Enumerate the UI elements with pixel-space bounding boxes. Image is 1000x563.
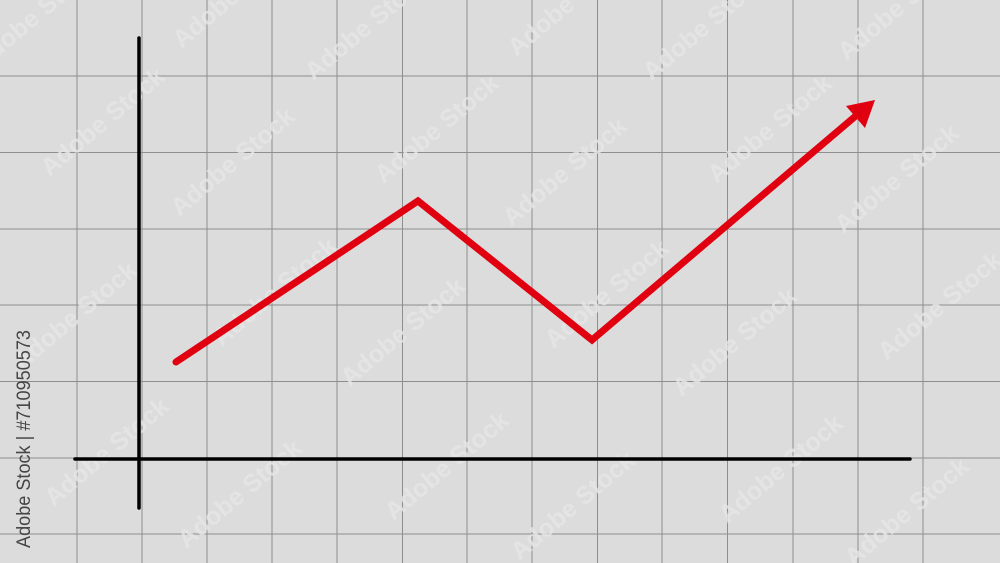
y axis bbox=[137, 38, 141, 508]
red trend line with arrow bbox=[176, 100, 875, 362]
watermarks: Adobe Stock bbox=[505, 446, 640, 563]
watermarks: Adobe Stock bbox=[369, 69, 504, 189]
watermarks: Adobe Stock bbox=[172, 434, 307, 554]
watermarks: Adobe Stock bbox=[667, 282, 802, 402]
watermarks: Adobe Stock bbox=[713, 409, 848, 529]
watermarks: Adobe Stock bbox=[207, 232, 342, 352]
watermarks: Adobe Stock bbox=[702, 69, 837, 189]
watermarks: Adobe Stock bbox=[539, 234, 674, 354]
watermarks: Adobe Stock bbox=[35, 62, 170, 182]
watermarks: Adobe Stock bbox=[165, 102, 300, 222]
stock id caption: Adobe Stock | #710950573 bbox=[14, 330, 35, 548]
watermarks: Adobe Stock bbox=[335, 272, 470, 392]
watermarks: Adobe Stock bbox=[497, 112, 632, 232]
watermarks: Adobe Stock bbox=[829, 119, 964, 239]
arrow head bbox=[846, 100, 875, 128]
watermarks: Adobe Stock bbox=[7, 256, 142, 376]
watermarks: Adobe Stock bbox=[379, 406, 514, 526]
watermarks: Adobe Stock bbox=[39, 392, 174, 512]
x axis bbox=[75, 457, 910, 461]
